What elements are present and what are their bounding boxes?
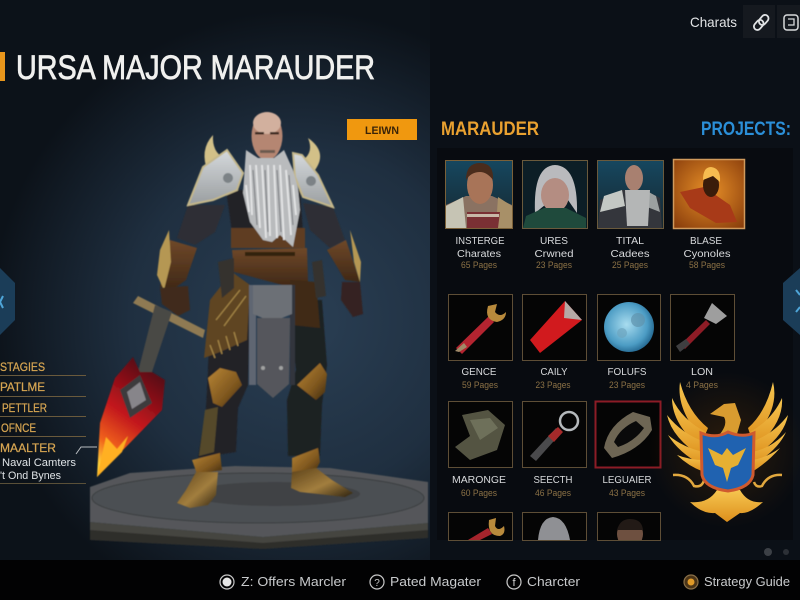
card labels row 2: CAILY <box>540 367 568 378</box>
button: learn: LEIWN <box>365 125 399 137</box>
card label: lon pages: 4 Pages <box>686 380 718 390</box>
footer item: character: f <box>512 577 516 589</box>
title: URSA MAJOR MARAUDER <box>16 49 375 87</box>
card labels row 1: BLASE <box>690 236 722 247</box>
callout: stat list: OFNCE <box>1 421 36 435</box>
item: red slab <box>522 294 586 360</box>
card labels row 3 <box>452 475 652 498</box>
callout: stat list: 't Ond Bynes <box>0 470 61 482</box>
card labels row 3: 60 Pages <box>461 488 497 498</box>
card labels row 1: TITAL <box>616 236 644 247</box>
nav arrow: right <box>783 268 800 335</box>
card labels row 3: LEGUAIER <box>602 475 652 486</box>
card labels row 2: FOLUFS <box>608 367 647 378</box>
card labels row 1: Charates <box>457 249 501 260</box>
dragon head <box>710 403 741 434</box>
tabard <box>249 285 295 398</box>
beard <box>243 150 300 247</box>
item: hammer <box>670 294 734 360</box>
torso <box>204 190 326 358</box>
character: marauder <box>97 112 363 508</box>
card labels row 1: Cadees <box>610 249 650 260</box>
footer item: offers: Z: Offers Marcler <box>241 574 347 589</box>
heading: marauder: MARAUDER <box>441 119 539 140</box>
card labels row 1: 25 Pages <box>612 260 648 270</box>
card labels row 2: 23 Pages <box>609 380 645 390</box>
card labels row 2 <box>462 367 713 390</box>
shield <box>701 432 754 491</box>
card labels row 2: LON <box>691 367 713 378</box>
card labels row 2: GENCE <box>462 367 497 378</box>
nav arrow: left <box>0 268 15 335</box>
scrolls <box>673 475 782 486</box>
weapon: flame blade <box>97 296 205 477</box>
card labels row 1: Cyonoles <box>684 249 730 260</box>
clipped row 4 cards <box>448 512 661 541</box>
callout: stat list: PETTLER <box>2 401 47 415</box>
left wing <box>667 382 708 472</box>
emblem: golden eagle crest <box>649 372 800 528</box>
footer item: strategy guide: Strategy Guide <box>704 574 790 589</box>
callout: stat list: STAGIES <box>0 360 45 374</box>
card labels row 1: 23 Pages <box>536 260 572 270</box>
callout: stat list: Naval Camters <box>2 457 76 469</box>
top navigation <box>690 5 800 38</box>
card labels row 3: 43 Pages <box>609 488 645 498</box>
card labels row 1: URES <box>540 236 568 247</box>
card: ures <box>522 160 588 228</box>
character platform <box>90 466 428 549</box>
callout: stat list <box>0 360 97 484</box>
head <box>252 112 282 160</box>
item: rock glove <box>448 402 512 468</box>
item: wrench <box>448 294 512 360</box>
pagination dots <box>764 548 789 556</box>
shoulder horns <box>204 135 320 172</box>
arms <box>157 203 363 317</box>
card labels row 2: 59 Pages <box>462 380 498 390</box>
right wing <box>748 382 788 472</box>
card: ttal <box>598 160 664 228</box>
footer item: character: Charcter <box>527 574 581 589</box>
callout: stat list: MAALTER <box>0 441 56 455</box>
footer item: character <box>507 574 581 589</box>
item: bone claw <box>596 402 660 468</box>
card labels row 1: 65 Pages <box>461 260 497 270</box>
card labels row 1 <box>456 236 730 270</box>
footer item: magater: ? <box>374 578 380 589</box>
pauldrons <box>188 150 333 207</box>
top navigation: Charats <box>690 14 737 30</box>
footer item: magater: Pated Magater <box>390 574 482 589</box>
footer bar <box>0 560 800 600</box>
card labels row 1: 58 Pages <box>689 260 725 270</box>
item: ring key <box>522 402 586 468</box>
card labels row 2: 23 Pages <box>536 380 571 390</box>
callout: stat list: PATLME <box>0 380 45 394</box>
card labels row 3: 46 Pages <box>535 488 571 498</box>
item: moon <box>598 294 660 360</box>
card: blase <box>674 160 744 228</box>
shield motif <box>708 448 746 482</box>
card labels row 3: SEECTH <box>534 475 572 486</box>
tail feathers <box>690 490 763 522</box>
card: insterge <box>446 160 512 228</box>
card labels row 1: INSTERGE <box>456 236 505 247</box>
legs <box>177 300 353 508</box>
panel: project grid <box>445 158 746 541</box>
button: learn <box>347 119 417 140</box>
card labels row 1: Crwned <box>534 249 574 260</box>
card labels row 3: MARONGE <box>452 475 506 486</box>
